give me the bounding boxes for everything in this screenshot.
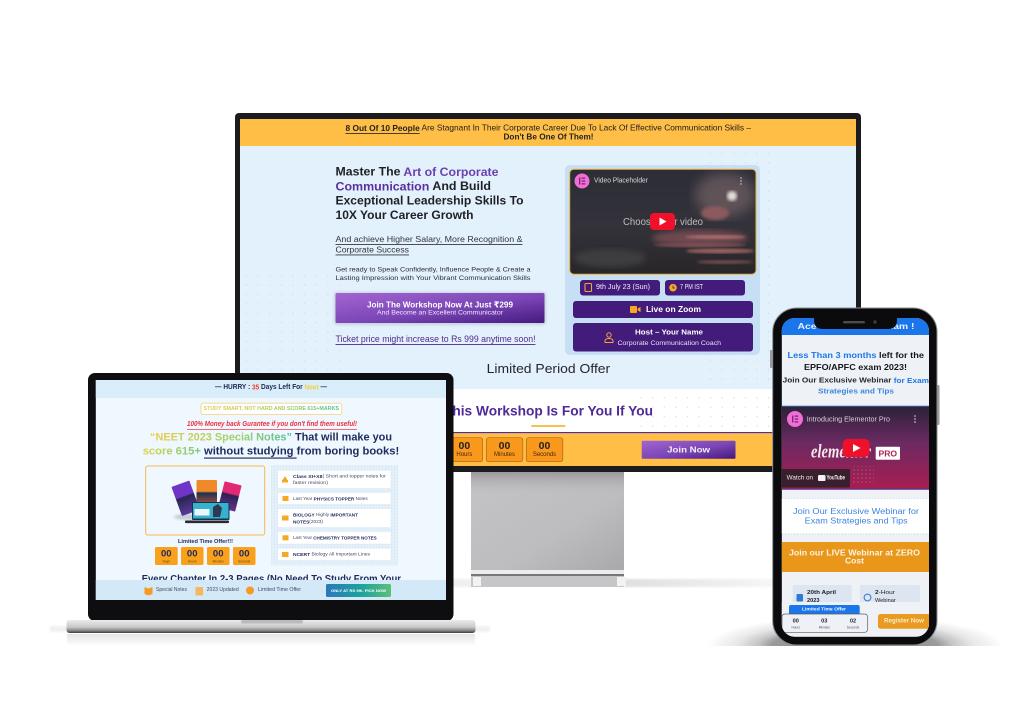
list item: biology (278, 509, 391, 527)
duration card: Webinar (875, 598, 896, 604)
hero heading: Exceptional Leadership Skills To (336, 194, 524, 208)
laptop countdown: 00 (161, 548, 172, 560)
hero subheading: Corporate Success (336, 244, 409, 254)
hero subheading: And achieve Higher Salary, More Recognition & (336, 234, 523, 244)
phone notch (814, 316, 897, 329)
host card: Corporate Communication Coach (618, 340, 721, 347)
watch on youtube chip: YouTube (826, 474, 845, 482)
laptop top bar: — HURRY : 35 Days Left For Neet — (215, 382, 328, 391)
phone countdown: 02 (850, 618, 856, 624)
ticket price note: Ticket price might increase to Rs 999 anytime soon! (336, 334, 536, 344)
phone floor shadow (717, 624, 992, 646)
date card (793, 585, 852, 609)
phone header bar: Ace Your Dream Exam ! (798, 322, 914, 331)
desktop monitor mockup (235, 113, 861, 587)
laptop mockup (50, 373, 490, 646)
icon: elementor logo (787, 411, 803, 427)
countdown: seconds: 00 (539, 440, 550, 452)
host card (573, 323, 753, 352)
date pill (580, 280, 660, 296)
duration card: 2-Hour (875, 590, 895, 596)
hero paragraph: Get ready to Speak Confidently, Influence People & Create a (336, 266, 531, 274)
sticky countdown bar (240, 432, 856, 466)
countdown: hours (446, 438, 483, 462)
phone sticky footer (782, 602, 930, 637)
tagline box: STUDY SMART, NOT HARD AND SCORE 615+MARKS (204, 406, 339, 412)
time pill (665, 280, 745, 296)
phone headline: Strategies and Tips (818, 386, 894, 396)
phone headline: Less Than 3 months left for the (788, 350, 924, 360)
cut-off chapter heading: Every Chapter In 2-3 Pages (No Need To Study From Your (142, 574, 401, 585)
book: purple (172, 480, 196, 516)
icon: elementor logo (574, 174, 590, 188)
phone headline (783, 350, 929, 396)
phone video (782, 406, 929, 490)
watch on youtube chip: Watch on (787, 474, 814, 482)
zoom pill: Live on Zoom (646, 305, 701, 314)
phone headline: Join Our Exclusive Webinar for Exam (783, 376, 929, 384)
join now button: Join Now (667, 445, 710, 455)
icon: youtube play button (843, 439, 870, 457)
laptop countdown: Minutes (213, 560, 224, 564)
top announcement banner: Don't Be One Of Them! (504, 132, 594, 142)
phone countdown: Minutes (819, 625, 830, 629)
laptop base (66, 620, 476, 633)
webinar callout: Join Our Exclusive Webinar for (793, 507, 919, 516)
countdown: seconds: Seconds (533, 452, 556, 458)
hero subheading (336, 234, 523, 254)
laptop bottom bar: Special Notes (156, 587, 187, 593)
limited time tab: Limited Time Offer (802, 606, 846, 612)
money back guarantee note: 100% Money back Gurantee if you don't find them useful! (187, 421, 358, 428)
limited time offer label: Limited Time Offer!!! (178, 539, 233, 545)
countdown: minutes: 00 (499, 440, 510, 452)
list item: class notes: faster revision) (293, 480, 329, 485)
hero heading: Master The Art of Corporate (336, 166, 499, 178)
zoom pill (573, 301, 753, 318)
laptop headline: “NEET 2023 Special Notes” That will make you (150, 432, 392, 444)
small laptop (185, 502, 230, 523)
workshop join button: Join The Workshop Now At Just ₹299 (367, 300, 513, 310)
list item: class notes: Class XI+XII ( Short and topper notes for (293, 474, 386, 478)
icon: calendar (196, 587, 203, 596)
hero paragraph (336, 266, 531, 282)
time pill: 7 PM IST (680, 284, 704, 291)
laptop body (88, 373, 454, 621)
top announcement banner: 8 Out Of 10 People Are Stagnant In Their Corporate Career Due To Lack Of Effective Communication Skills – (346, 124, 751, 132)
phone mockup (770, 308, 940, 645)
live webinar banner (782, 542, 929, 572)
book: orange (196, 480, 217, 502)
live webinar banner: Join our LIVE Webinar at ZERO (789, 548, 920, 558)
laptop headline: score 615+ without studying from boring books! (143, 446, 399, 458)
laptop bottom bar (96, 580, 446, 600)
laptop countdown: 00 (213, 548, 223, 560)
video placeholder: Video Placeholder (594, 178, 649, 184)
hero heading: Communication And Build (336, 180, 491, 193)
book shadow (174, 514, 206, 520)
countdown: minutes (486, 438, 523, 462)
video placeholder: Choose your video (623, 216, 703, 228)
laptop headline (143, 432, 399, 458)
laptop countdown: 00 (239, 548, 249, 560)
phone countdown (782, 614, 868, 632)
laptop bottom bar: ONLY AT RS 99/- PICK NOW (331, 588, 386, 593)
icon: menu dots (914, 415, 916, 423)
pro badge: PRO (878, 448, 897, 458)
monitor bezel (235, 113, 861, 472)
register now button: Register Now (884, 618, 924, 624)
laptop bottom bar: Limited Time Offer (258, 587, 301, 593)
list item: class notes (278, 471, 391, 488)
list item: biology: BIOLOGY Highly IMPORTANT (293, 512, 358, 517)
laptop bottom bar: 2023 Updated (207, 587, 239, 593)
webinar callout (782, 498, 929, 534)
laptop offer button (326, 584, 391, 597)
phone body (773, 308, 937, 645)
hero paragraph: Lasting Impression with Your Vibrant Communication Skills (336, 275, 531, 282)
limited time tab (789, 605, 860, 617)
countdown: minutes: Minutes (494, 452, 515, 458)
countdown: hours: 00 (459, 440, 470, 452)
list item: physics: Last Year PHYSICS TOPPER Notes (293, 496, 368, 501)
workshop join button: And Become an Excellent Communicator (377, 310, 503, 317)
limited period offer heading: Limited Period Offer (487, 362, 610, 376)
countdown: seconds (526, 438, 563, 462)
top announcement banner (240, 119, 856, 146)
pro badge (876, 447, 900, 460)
list item: chemistry: Last Year CHEMISTRY TOPPER NOTES (293, 535, 377, 540)
hero heading (336, 166, 524, 222)
phone screen (782, 318, 930, 637)
phone headline: EPFO/APFC exam 2023! (804, 362, 907, 372)
notes list panel (271, 465, 398, 566)
tagline box (201, 403, 342, 415)
workshop join button (334, 292, 546, 325)
live webinar banner: Cost (845, 556, 864, 566)
icon: clock (246, 586, 254, 594)
video placeholder (570, 169, 756, 274)
product image box (146, 466, 265, 535)
list item: biology: NOTES(2023) (293, 519, 323, 524)
monitor stand (440, 472, 774, 587)
panel: video and event details (565, 165, 760, 355)
laptop countdown: Hours (188, 560, 197, 564)
duration card (860, 585, 920, 609)
laptop reflection (50, 626, 490, 646)
laptop countdown (155, 547, 256, 565)
list item: ncert: NCERT Biology All Important Lines (293, 552, 371, 556)
watch on youtube chip (782, 469, 850, 488)
icon: play button (650, 213, 675, 230)
laptop top bar (96, 380, 446, 398)
countdown: hours: Hours (456, 452, 472, 458)
icon: book (144, 587, 152, 596)
phone video: elementor (811, 442, 871, 462)
date card: 20th April (807, 590, 837, 596)
laptop countdown: Seconds (238, 560, 251, 564)
monitor screen background (240, 119, 856, 466)
date card: 2023 (807, 598, 819, 604)
laptop screen (96, 380, 446, 600)
phone side buttons (770, 350, 940, 425)
join now button (642, 441, 736, 459)
phone countdown: 00 (793, 618, 799, 624)
phone header bar (782, 318, 929, 335)
book: pink (218, 481, 242, 512)
phone video: Introducing Elementor Pro (807, 414, 890, 424)
phone countdown: 03 (821, 618, 827, 624)
phone countdown: Seconds (847, 625, 860, 629)
laptop countdown: 00 (187, 548, 197, 560)
register now button (878, 614, 930, 629)
phone countdown: Hours (791, 625, 800, 629)
icon: menu dots (740, 177, 742, 185)
workshop section heading: This Workshop Is For You If You (444, 403, 653, 419)
webinar callout: Exam Strategies and Tips (805, 516, 908, 526)
date pill: 9th July 23 (Sun) (596, 284, 650, 291)
laptop countdown: Days (163, 560, 170, 564)
host card: Host – Your Name (635, 328, 703, 336)
hero heading: 10X Your Career Growth (336, 209, 474, 222)
